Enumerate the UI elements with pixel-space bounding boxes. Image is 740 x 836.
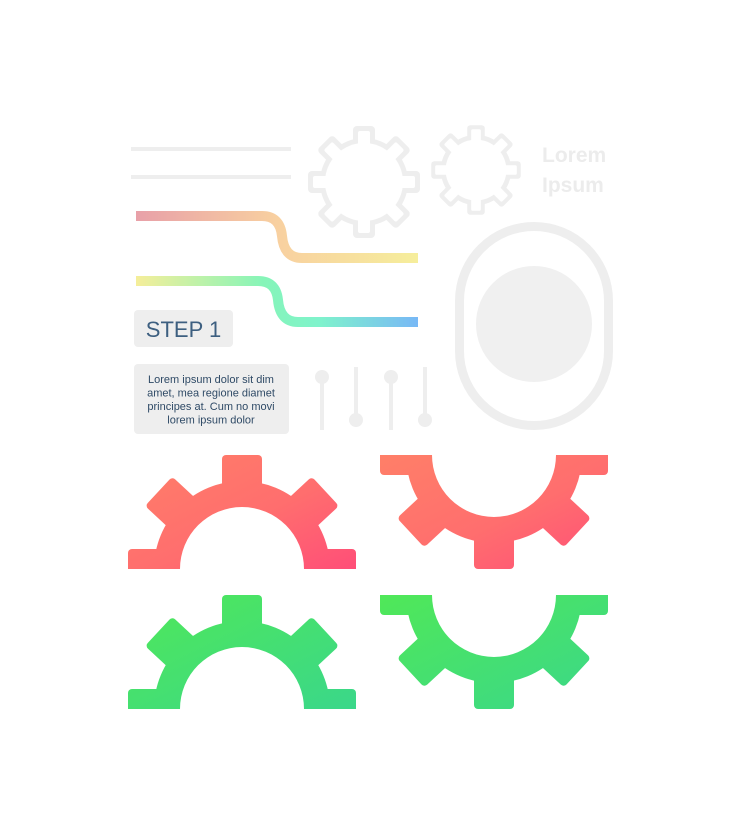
pins bbox=[315, 367, 432, 430]
red gear top bbox=[128, 455, 356, 569]
gradient path 2 bbox=[136, 281, 418, 322]
green gear top bbox=[128, 595, 356, 709]
text block: principes at. Cum no movi bbox=[147, 401, 275, 413]
Lorem Ipsum label bbox=[542, 144, 606, 197]
text block: Lorem ipsum dolor sit dim bbox=[148, 374, 274, 386]
text lines bbox=[131, 149, 291, 177]
gradient path 1 bbox=[136, 216, 418, 258]
STEP 1 label: STEP 1 bbox=[146, 317, 221, 342]
oval frame bbox=[460, 226, 608, 426]
text block bbox=[134, 364, 289, 434]
text block: lorem ipsum dolor bbox=[167, 414, 255, 426]
green gear bottom bbox=[380, 595, 608, 709]
outline gear large bbox=[308, 126, 420, 238]
Lorem Ipsum label: Lorem bbox=[542, 144, 606, 167]
text block: amet, mea regione diamet bbox=[147, 388, 275, 400]
Lorem Ipsum label: Ipsum bbox=[542, 174, 604, 197]
red gear bottom bbox=[380, 455, 608, 569]
STEP 1 label bbox=[134, 310, 233, 347]
outline gear small bbox=[431, 125, 521, 215]
